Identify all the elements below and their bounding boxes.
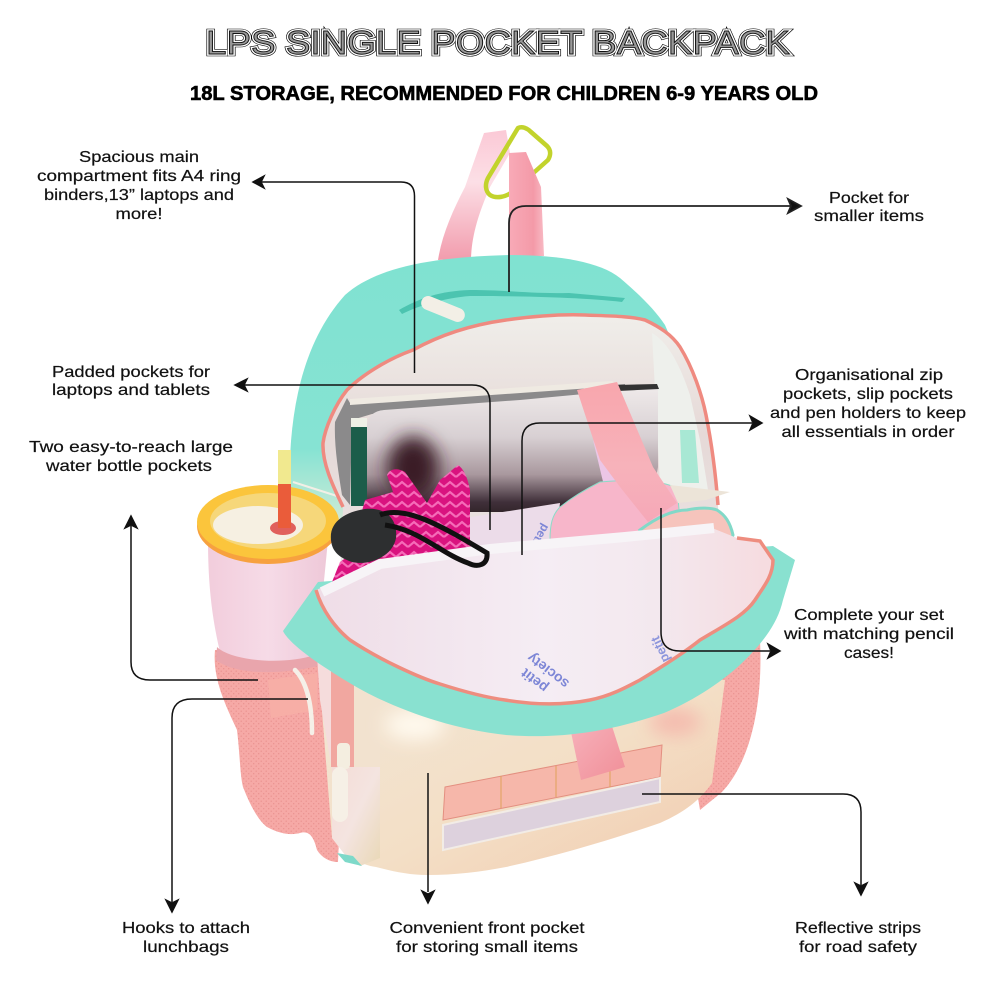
arrow: padded pockets: [235, 379, 490, 530]
umbrella fabric: [332, 465, 488, 582]
pouch print: petit: [528, 522, 553, 550]
lilac strap piece: [593, 440, 620, 490]
text: padded pockets: Padded pockets for: [52, 364, 211, 381]
text: water bottle pockets: [29, 439, 233, 475]
side lining teal: [680, 430, 699, 483]
pale strip beside zip: [317, 655, 332, 770]
flap teal border: [283, 546, 795, 736]
text: reflective strips: for road safety: [799, 939, 917, 956]
text: hooks: Hooks to attach: [122, 920, 250, 937]
left handle strap: [438, 130, 510, 260]
text: front pocket: Convenient front pocket: [390, 920, 585, 937]
bottle pocket rim: [216, 647, 318, 672]
zipper piping: [323, 315, 718, 507]
text: pencil cases: cases!: [844, 645, 894, 662]
text: organisational pockets: pockets, slip pockets: [783, 386, 953, 403]
umbrella: [331, 509, 487, 565]
text: water bottle pockets: water bottle pockets: [45, 458, 212, 475]
text: main compartment: compartment fits A4 ring: [37, 168, 241, 185]
teal main body: [290, 255, 700, 540]
flap print: petit: petit: [517, 665, 551, 696]
text: pocket for smaller items: [814, 190, 924, 225]
text: organisational pockets: and pen holders to keep: [770, 405, 966, 422]
title: LPS SINGLE POCKET BACKPACK: [206, 24, 790, 61]
text: pencil cases: Complete your set: [794, 607, 945, 624]
flap inner: [316, 528, 773, 704]
arrow: pencil cases: [661, 508, 780, 658]
text: main compartment: more!: [116, 206, 162, 223]
text: organisational pockets: [770, 367, 966, 441]
pink mesh side pocket: [215, 650, 345, 862]
text: front pocket: [390, 920, 585, 956]
flap piping: [316, 538, 773, 704]
peach webbing: [443, 745, 662, 820]
teal corner: [337, 853, 362, 866]
top pocket zip: [399, 290, 625, 324]
title: LPS SINGLE POCKET BACKPACK: [206, 24, 790, 61]
cream panel: [353, 687, 380, 767]
text: hooks: [122, 920, 250, 956]
subtitle: 18L STORAGE, RECOMMENDED FOR CHILDREN 6-9 YEARS OLD: [190, 83, 818, 105]
text: padded pockets: laptops and tablets: [52, 382, 210, 399]
text: pencil cases: with matching pencil: [783, 626, 954, 643]
front zip: [331, 668, 354, 822]
text: pocket for smaller items: smaller items: [814, 208, 924, 225]
laptop dark reflection: [387, 436, 439, 500]
text: main compartment: binders,13” laptops and: [44, 187, 234, 204]
felt sleeve: [335, 384, 625, 505]
lower stripe: [293, 482, 337, 496]
arrow: smaller items pocket: [509, 199, 801, 292]
reflective strip: [443, 778, 660, 850]
arrow: reflective strips: [642, 794, 867, 895]
back interior lining: [323, 315, 720, 580]
arrow: organisational pockets: [522, 416, 762, 555]
lilac interior pocket: [465, 503, 560, 560]
laptop edge: [617, 384, 659, 391]
flap print: society: society: [524, 650, 572, 692]
front pink highlight: [649, 708, 701, 736]
right mesh pocket: [680, 640, 760, 810]
side lining white: [652, 333, 708, 490]
text: hooks: lunchbags: [143, 939, 229, 956]
carabiner: [486, 127, 550, 197]
arrow: water bottle pockets: [125, 516, 258, 680]
iridescent panel: [332, 767, 380, 866]
text: pencil cases: [783, 607, 954, 662]
laptop: [367, 387, 658, 512]
text: padded pockets: [52, 364, 211, 399]
text: organisational pockets: Organisational zip: [795, 367, 943, 384]
text: front pocket: for storing small items: [396, 939, 578, 956]
text: main compartment: Spacious main: [79, 149, 199, 166]
text: reflective strips: Reflective strips: [795, 920, 921, 937]
flap print: right: petit: [647, 633, 673, 665]
backpack illustration: [197, 127, 795, 875]
hook loop: [268, 670, 317, 733]
text: water bottle pockets: Two easy-to-reach large: [29, 439, 233, 456]
front highlight: [385, 710, 445, 740]
arrow: hooks: [166, 699, 308, 912]
title: LPS SINGLE POCKET BACKPACK: [206, 24, 790, 61]
text: organisational pockets: all essentials in order: [782, 424, 955, 441]
sleeve top edge: [350, 381, 620, 405]
bottle: [197, 450, 339, 665]
teal-edged pencil case: [640, 485, 733, 545]
right handle strap: [509, 152, 544, 256]
pink strap: [577, 382, 677, 522]
arrow: front pocket: [422, 773, 434, 903]
text: pocket for smaller items: Pocket for: [829, 190, 910, 207]
arrow: main compartment: [253, 176, 414, 373]
text: reflective strips: [795, 920, 921, 956]
text: main compartment: [37, 149, 241, 223]
flap zip: [322, 528, 714, 592]
pink pouch: [550, 480, 680, 545]
front pocket: [318, 660, 725, 875]
tab: [571, 723, 625, 780]
green book: [351, 418, 367, 506]
